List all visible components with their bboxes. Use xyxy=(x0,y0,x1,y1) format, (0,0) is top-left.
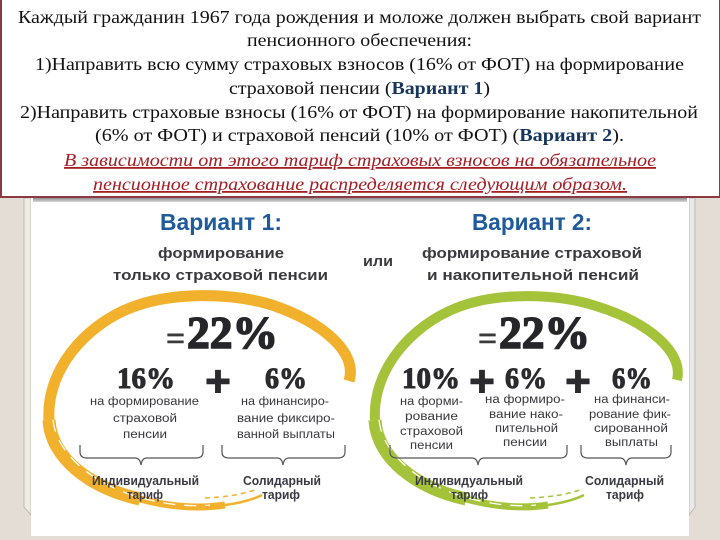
variant 2: 10 percent column: 10% xyxy=(402,362,460,395)
total: variant 1: = xyxy=(166,323,185,353)
variant 2: 6 percent fixed column: на финанси- xyxy=(594,394,670,406)
variant 1: 6 percent column: 6% xyxy=(265,362,307,395)
variant 1: 6 percent column: на финансиро- xyxy=(241,396,329,408)
variant 1: 16 percent column: страховой xyxy=(113,413,177,425)
variant 1: 6 percent column: вание фиксиро- xyxy=(237,413,335,425)
heading: variant 2: Вариант 2: xyxy=(472,209,592,235)
total: variant 2: = xyxy=(478,323,497,353)
label: individual tariff 2: тариф xyxy=(451,488,488,502)
label: individual tariff 1: тариф xyxy=(127,488,163,502)
brace: solidarity tariff 2 xyxy=(581,445,671,465)
brace: individual tariff 1 xyxy=(80,445,203,465)
variant 2: 6 percent fixed column: сированной xyxy=(594,423,668,435)
brace: solidarity tariff 1 xyxy=(222,445,345,465)
red italic note xyxy=(64,150,656,194)
variant 2: 6 percent funded column: 6% xyxy=(505,362,547,395)
yellow ring xyxy=(49,296,350,507)
heading: variant 1: Вариант 1: xyxy=(160,209,282,235)
variant 2: 6 percent funded column: пенсии xyxy=(503,437,547,449)
infographic picture xyxy=(31,198,689,536)
label: solidarity tariff 1 xyxy=(243,474,321,502)
label: individual tariff 1: Индивидуальный xyxy=(92,474,199,488)
option 2 text xyxy=(20,102,698,146)
variant 1: 6 percent column xyxy=(237,362,335,441)
subheading: variant 2: и накопительной пенсий xyxy=(427,268,639,284)
variant 2: 10 percent column: рование xyxy=(405,411,458,423)
subheading: variant 1: формирование xyxy=(158,246,284,262)
total: variant 1: 22% xyxy=(187,307,278,358)
plus sign: + xyxy=(205,357,231,406)
variant 2: 10 percent column xyxy=(400,362,463,452)
label: or: или xyxy=(363,254,393,270)
red italic note: пенсионное страхование распределяется следующим образом. xyxy=(93,174,627,194)
option 1 text: 1)Направить всю сумму страховых взносов (16% от ФОТ) на формирование xyxy=(35,54,684,75)
plus sign: + xyxy=(565,357,591,406)
panel interior xyxy=(2,0,719,196)
variant 1: 16 percent column xyxy=(90,362,199,441)
variant 2: 6 percent funded column: на формиро- xyxy=(485,394,565,406)
label: solidarity tariff 2 xyxy=(585,474,664,502)
variant 1: 16 percent column: 16% xyxy=(117,362,175,395)
plus sign: + xyxy=(469,357,495,406)
variant 2: 10 percent column: пенсии xyxy=(410,440,453,452)
variant 2: 10 percent column: страховой xyxy=(400,426,463,438)
left picture bevel xyxy=(24,198,31,515)
panel box xyxy=(0,0,720,198)
label: individual tariff 2 xyxy=(415,474,523,502)
variant 2: 10 percent column: на форми- xyxy=(400,396,463,408)
brace: individual tariff 2 xyxy=(390,445,567,465)
top text panel xyxy=(0,0,720,198)
variant 2: 6 percent funded column: вание нако- xyxy=(489,409,563,421)
option 2 text: (6% от ФОТ) и страховой пенсий (10% от ФОТ) ( Вариант 2 ). xyxy=(95,125,624,146)
variant 2: 6 percent fixed column: выплаты xyxy=(605,437,658,449)
subheading: variant 1: только страховой пенсии xyxy=(113,268,328,284)
green ring xyxy=(375,296,678,507)
option 1 text xyxy=(35,54,684,99)
intro text xyxy=(18,7,701,50)
variant 2: 6 percent funded column: пительной xyxy=(495,423,558,435)
variant 2: 6 percent fixed column: рование фик- xyxy=(589,409,671,421)
variant 2: 6 percent fixed column xyxy=(589,362,671,449)
picture background xyxy=(31,198,689,536)
subheading: variant 1 xyxy=(113,246,328,284)
variant 1: 16 percent column: пенсии xyxy=(123,429,167,441)
label: solidarity tariff 1: тариф xyxy=(262,488,300,502)
intro text: пенсионного обеспечения: xyxy=(247,30,472,50)
label: solidarity tariff 2: тариф xyxy=(606,488,644,502)
subheading: variant 2 xyxy=(422,246,642,284)
label: solidarity tariff 1: Солидарный xyxy=(243,474,321,488)
variant 2: 6 percent fixed column: 6% xyxy=(612,362,652,395)
label: individual tariff 2: Индивидуальный xyxy=(415,474,523,488)
right picture bevel xyxy=(689,198,695,515)
panel shadow xyxy=(33,198,687,202)
subheading: variant 2: формирование страховой xyxy=(422,246,642,262)
variant 2: 6 percent funded column xyxy=(485,362,565,449)
option 1 text: страховой пенсии ( Вариант 1 ) xyxy=(229,78,490,99)
intro text: Каждый гражданин 1967 года рождения и моложе должен выбрать свой вариант xyxy=(18,7,701,27)
total: variant 2: 22% xyxy=(499,307,590,358)
label: individual tariff 1 xyxy=(92,474,199,502)
label: solidarity tariff 2: Солидарный xyxy=(585,474,664,488)
variant 1: 16 percent column: на формирование xyxy=(90,396,199,408)
option 2 text: 2)Направить страховые взносы (16% от ФОТ) на формирование накопительной xyxy=(20,102,698,123)
variant 1: 6 percent column: ванной выплаты xyxy=(237,429,335,441)
red italic note: В зависимости от этого тариф страховых взносов на обязательное xyxy=(64,150,656,170)
